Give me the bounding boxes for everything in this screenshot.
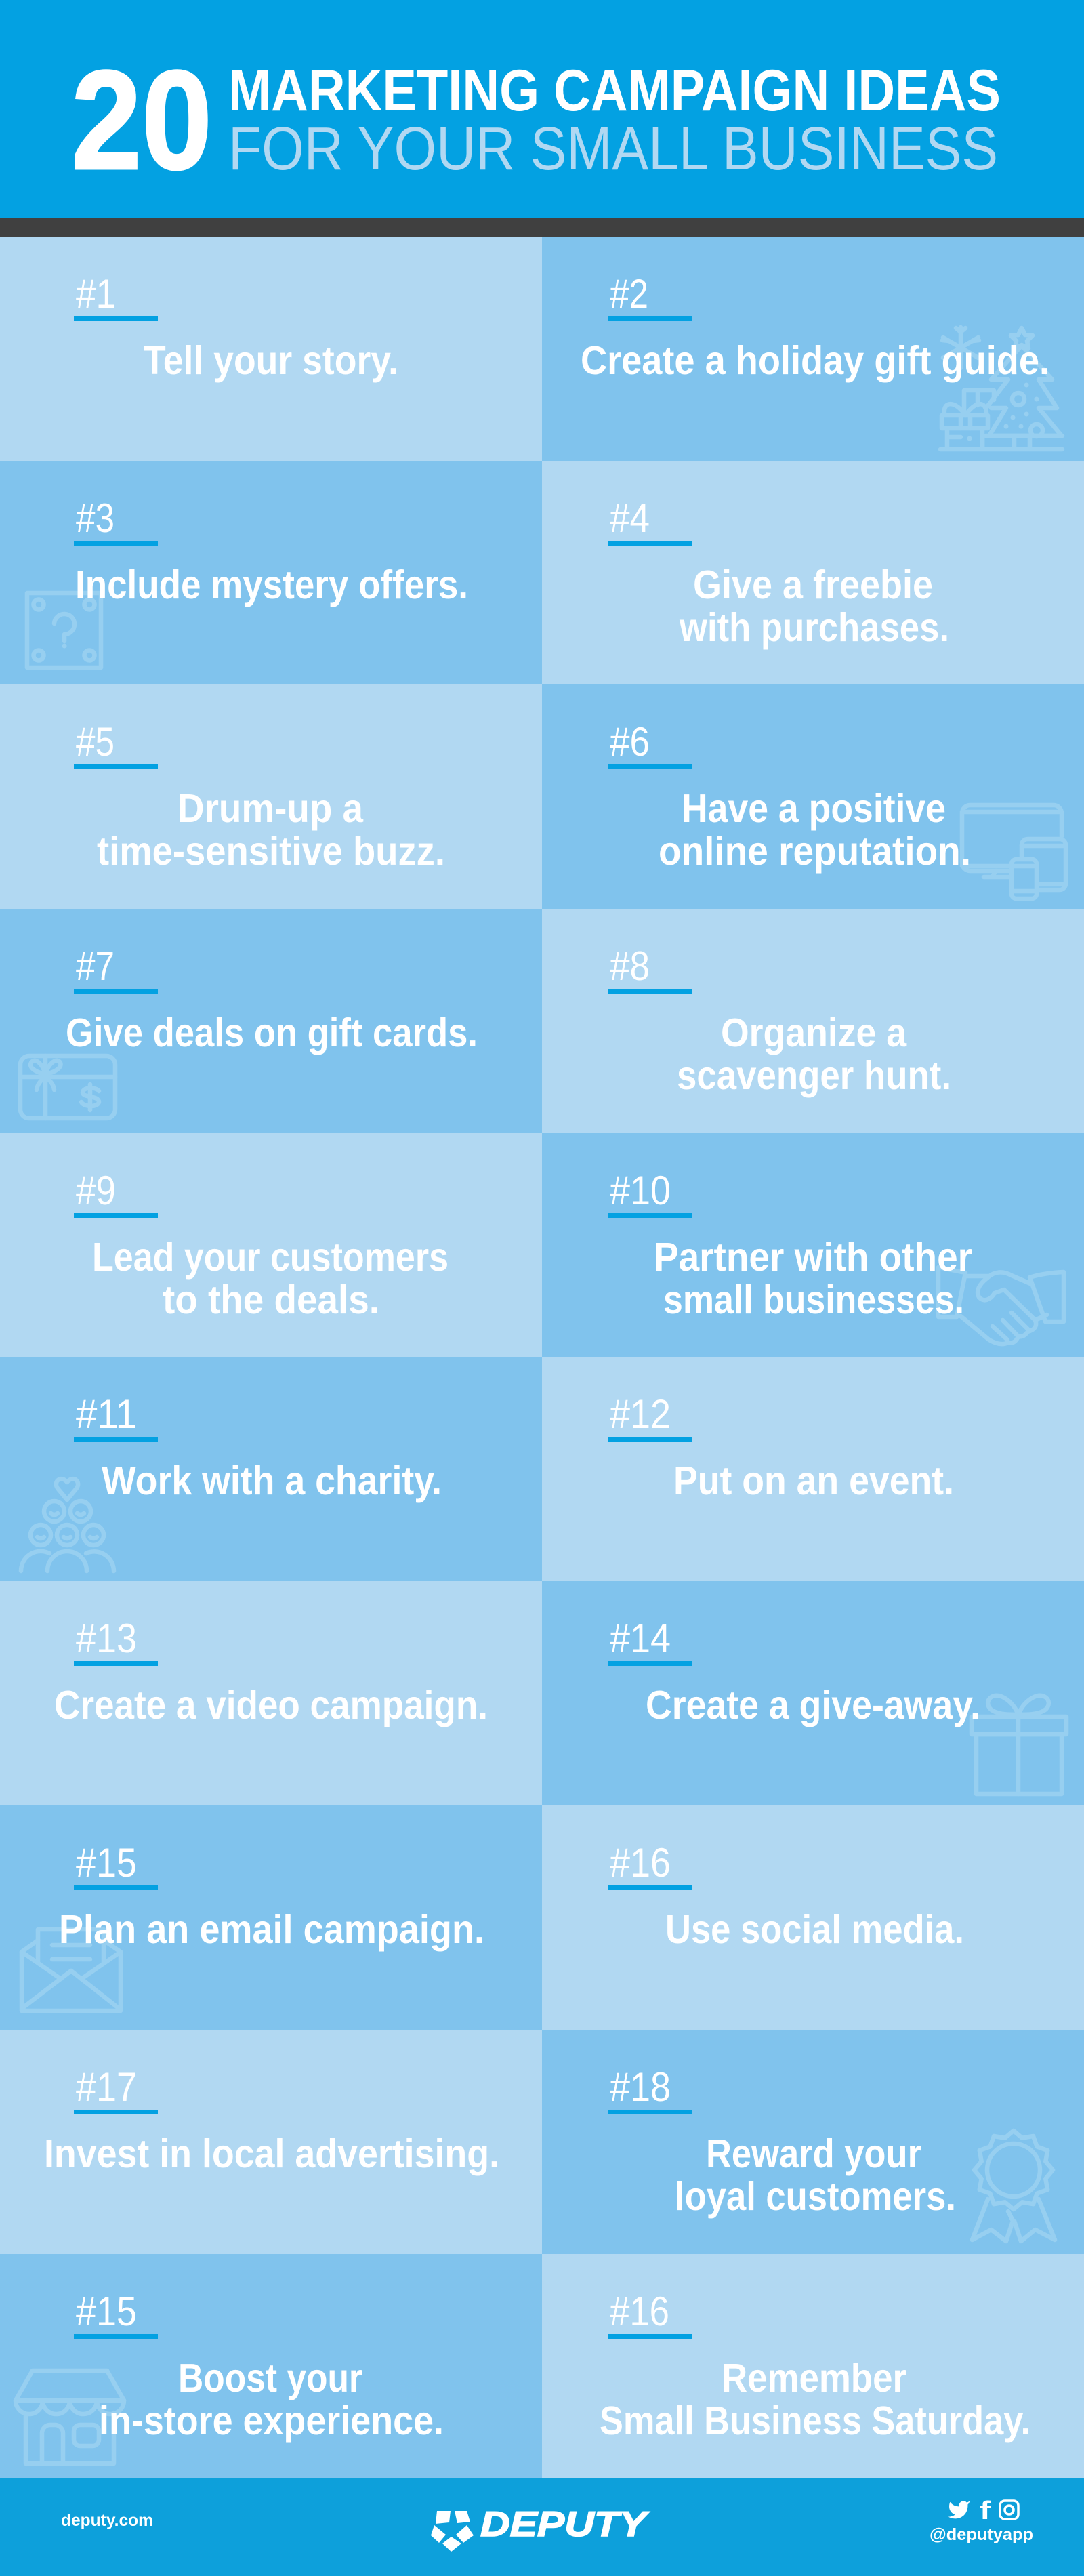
number 2: #2	[610, 271, 648, 316]
panel: idea 5	[0, 684, 542, 909]
social handle: @deputyapp	[930, 2525, 1033, 2544]
icon: twitter	[948, 2501, 970, 2518]
icon: holiday tree and gifts	[940, 327, 1062, 449]
number 15: #15	[76, 2289, 137, 2334]
icon: mystery box	[27, 593, 101, 668]
number 17: #17	[76, 2064, 137, 2110]
icon: facebook: f	[980, 2497, 991, 2525]
idea text 10: Partner with other	[654, 1235, 972, 1280]
panel: idea 6	[542, 684, 1084, 909]
panel: idea 12	[542, 1357, 1084, 1581]
idea text 1: Tell your story.	[144, 338, 398, 383]
idea text 8: scavenger hunt.	[677, 1053, 951, 1098]
idea text 6	[659, 786, 971, 874]
icon: gift box	[972, 1696, 1066, 1794]
panel: idea 13	[0, 1581, 542, 1805]
idea text 10	[654, 1235, 972, 1322]
idea text 9: Lead your customers	[92, 1235, 449, 1280]
icon: storefront	[16, 2371, 124, 2463]
idea text 9: to the deals.	[163, 1277, 379, 1322]
idea text 7: Give deals on gift cards.	[66, 1010, 478, 1055]
icon: devices	[962, 805, 1066, 899]
idea text 8	[677, 1010, 951, 1098]
panel: idea 16	[542, 1805, 1084, 2030]
number 15: #15	[76, 1840, 137, 1885]
panel: idea 19 (numbered #15)	[0, 2254, 542, 2478]
idea text 5	[97, 786, 445, 874]
idea text 12: Put on an event.	[673, 1458, 954, 1503]
idea text 20	[600, 2356, 1030, 2443]
number 18: #18	[610, 2064, 671, 2110]
panel: idea 17	[0, 2030, 542, 2254]
number 5: #5	[76, 719, 114, 764]
number 16: #16	[610, 1840, 671, 1885]
panel: idea 11	[0, 1357, 542, 1581]
panel: idea 7	[0, 909, 542, 1133]
social links	[930, 2497, 1033, 2544]
icon: community with heart	[21, 1479, 114, 1571]
idea text 14: Create a give-away.	[646, 1683, 980, 1727]
panel: idea 4	[542, 461, 1084, 684]
website: deputy.com	[61, 2511, 153, 2530]
number 4: #4	[610, 495, 650, 541]
idea text 6: Have a positive	[682, 786, 946, 831]
idea text 19: in-store experience.	[99, 2398, 444, 2443]
icon: award rosette	[972, 2131, 1055, 2241]
number 13: #13	[76, 1616, 137, 1661]
icon: handshake	[938, 1267, 1064, 1344]
idea text 19: Boost your	[178, 2356, 362, 2400]
logo: deputy	[431, 2505, 650, 2552]
panel: idea 18	[542, 2030, 1084, 2254]
idea text 6: online reputation.	[659, 829, 971, 874]
idea text 4: with purchases.	[679, 605, 949, 650]
idea text 20: Remember	[722, 2356, 906, 2400]
icon: open envelope	[22, 1929, 121, 2011]
header banner	[0, 0, 1084, 218]
number 16: #16	[610, 2289, 669, 2334]
number 7: #7	[76, 943, 114, 989]
idea text 8: Organize a	[721, 1010, 907, 1055]
idea text 19	[99, 2356, 444, 2443]
logo wordmark: DEPUTY	[480, 2505, 650, 2544]
panel: idea 15	[0, 1805, 542, 2030]
panel: idea 20 (numbered #16)	[542, 2254, 1084, 2478]
panel: idea 8	[542, 909, 1084, 1133]
idea text 4	[679, 563, 949, 650]
idea text 4: Give a freebie	[693, 563, 933, 607]
number 10: #10	[610, 1168, 671, 1213]
number 3: #3	[76, 495, 114, 541]
idea text 20: Small Business Saturday.	[600, 2398, 1030, 2443]
number 14: #14	[610, 1616, 671, 1661]
number 1: #1	[76, 271, 116, 316]
idea text 15: Plan an email campaign.	[59, 1907, 484, 1952]
panel: idea 9	[0, 1133, 542, 1357]
number 9: #9	[76, 1168, 116, 1213]
panel: idea 10	[542, 1133, 1084, 1357]
title line 1: MARKETING CAMPAIGN IDEAS	[228, 58, 1001, 123]
idea text 5: Drum-up a	[178, 786, 364, 831]
panel: idea 2	[542, 237, 1084, 461]
number 12: #12	[610, 1391, 671, 1437]
number 11: #11	[76, 1391, 137, 1437]
panel: idea 3	[0, 461, 542, 684]
idea text 11: Work with a charity.	[102, 1458, 442, 1503]
title line 2: FOR YOUR SMALL BUSINESS	[228, 115, 998, 183]
idea text 2: Create a holiday gift guide.	[581, 338, 1049, 383]
idea text 10: small businesses.	[663, 1277, 964, 1322]
logo mark	[431, 2511, 474, 2552]
idea text 18: loyal customers.	[675, 2174, 956, 2219]
idea text 5: time-sensitive buzz.	[97, 829, 445, 874]
idea text 9	[92, 1235, 449, 1322]
panel: idea 1	[0, 237, 542, 461]
idea text 16: Use social media.	[665, 1907, 964, 1952]
panel: idea 14	[542, 1581, 1084, 1805]
idea text 3: Include mystery offers.	[75, 563, 468, 607]
icon: instagram	[1000, 2501, 1018, 2519]
footer	[0, 2478, 1084, 2576]
title number 20: 20	[71, 42, 212, 199]
number 6: #6	[610, 719, 650, 764]
idea text 18	[675, 2131, 956, 2219]
idea text 17: Invest in local advertising.	[44, 2131, 499, 2176]
icon: gift card	[20, 1056, 115, 1118]
number 8: #8	[610, 943, 650, 989]
idea text 13: Create a video campaign.	[54, 1683, 488, 1727]
idea text 18: Reward your	[706, 2131, 921, 2176]
